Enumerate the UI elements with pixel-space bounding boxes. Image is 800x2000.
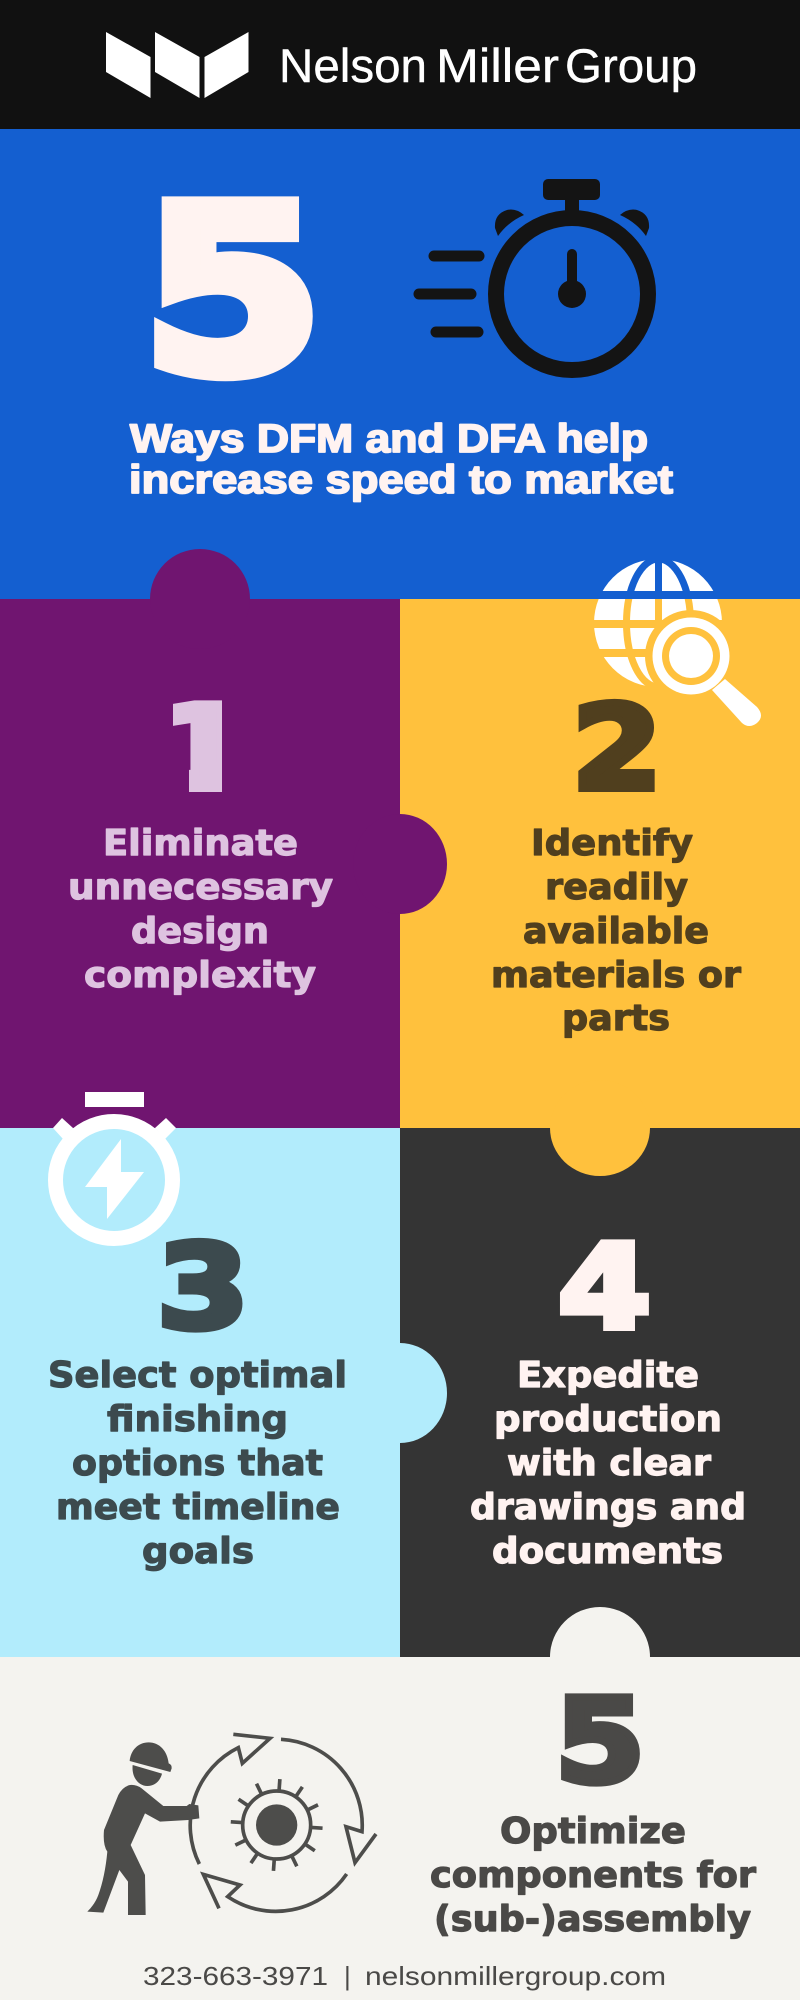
text: step 1: design (131, 911, 269, 952)
header bar (0, 0, 800, 129)
text: step 4: drawings and (470, 1487, 746, 1528)
text: step 2: parts (562, 998, 670, 1039)
text: step 2: readily (545, 867, 688, 908)
number 2: 2 (572, 682, 662, 816)
panel: step 3 finishing options (0, 1092, 447, 1657)
heading: increase speed to market (129, 458, 673, 502)
footer contact line: nelsonmillergroup.com (365, 1961, 666, 1991)
number 5: 5 (555, 1674, 645, 1810)
panel: step 5 optimize components (0, 1607, 800, 2000)
text: step 4 (470, 1355, 746, 1572)
text: step 3: Select optimal (48, 1355, 347, 1396)
hero number 5: 5 (142, 159, 323, 426)
heading (129, 417, 673, 502)
heading: Ways DFM and DFA help (130, 417, 648, 461)
number 1: 1 (153, 682, 256, 816)
text: step 4: production (494, 1399, 722, 1440)
logo mark (106, 32, 248, 98)
text: step 3 (48, 1355, 347, 1572)
text: step 2: available (523, 911, 709, 952)
text: step 1 (68, 823, 333, 996)
icon: worker pushing cycle with gear (87, 1734, 376, 1915)
logo wordmark: Nelson (279, 39, 427, 92)
text: step 3: goals (142, 1531, 254, 1572)
number 3: 3 (157, 1220, 249, 1356)
footer contact line (143, 1961, 666, 1991)
panel: step 2 identify materials (400, 550, 800, 1176)
icon: globe with magnifier (594, 560, 761, 726)
text: step 3: finishing (107, 1399, 288, 1440)
panel: hero title (0, 129, 800, 599)
number 4: 4 (558, 1220, 651, 1356)
text: step 5: components for (430, 1855, 756, 1896)
text: step 3: meet timeline (56, 1487, 340, 1528)
panel: step 4 expedite production (400, 1128, 800, 1657)
text: step 5: (sub-)assembly (434, 1899, 751, 1940)
logo wordmark: Group (565, 39, 697, 92)
text: step 5: Optimize (500, 1811, 686, 1852)
panel: step 1 eliminate complexity (0, 549, 447, 1128)
text: step 2: Identify (531, 823, 693, 864)
text: step 4: documents (492, 1531, 723, 1572)
footer contact line: 323-663-3971 (143, 1961, 328, 1991)
text: step 3: options that (72, 1443, 323, 1484)
logo wordmark: Miller (436, 39, 559, 92)
text: step 4: Expedite (517, 1355, 699, 1396)
text: step 2: materials or (491, 955, 741, 996)
text: step 1: unnecessary (68, 867, 333, 908)
text: step 2 (491, 823, 741, 1039)
icon: stopwatch with speed lines (419, 179, 649, 370)
text: step 1: complexity (84, 955, 316, 996)
text: step 4: with clear (507, 1443, 711, 1484)
logo wordmark (279, 39, 697, 92)
text: step 5 (430, 1811, 756, 1940)
icon: lightning stopwatch (53, 1092, 176, 1238)
footer contact line: | (344, 1961, 351, 1991)
text: step 1: Eliminate (103, 823, 298, 864)
